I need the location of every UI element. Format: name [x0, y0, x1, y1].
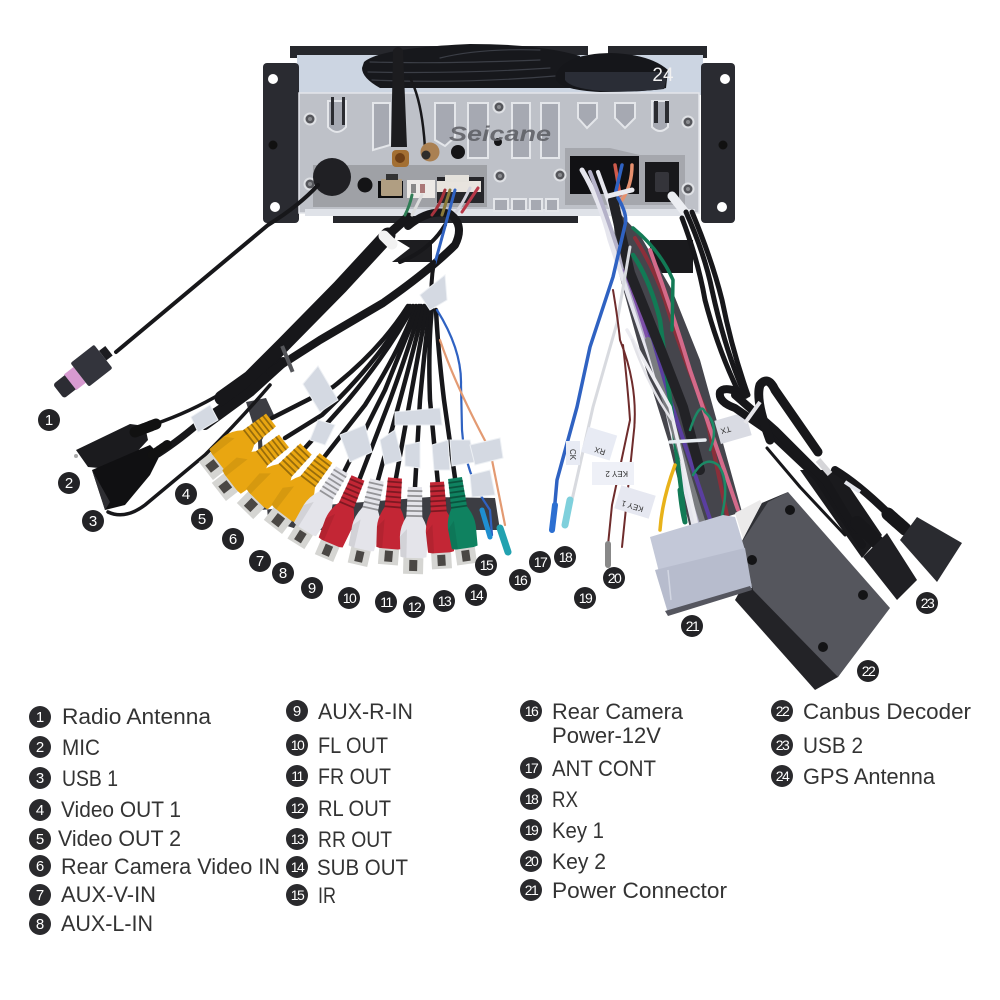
white plug 2: [344, 477, 391, 568]
antenna stub: [391, 47, 407, 147]
cable tie: [745, 402, 760, 423]
cable: strand 2: [692, 212, 748, 395]
cable: bundle to socket: [388, 217, 408, 235]
green plug: [441, 476, 481, 566]
wire: blue: [553, 198, 626, 525]
cable tie upper: [608, 190, 632, 196]
wire: RX white: [572, 247, 630, 500]
callout 1: 1: [45, 412, 53, 429]
item 19: [520, 818, 604, 843]
bundled black sleeve: [613, 200, 700, 470]
white plug 1: [284, 463, 354, 551]
white sleeve: [845, 482, 860, 492]
item 4: Video OUT 1: [61, 797, 181, 822]
top edge shade: [740, 492, 788, 545]
callout 5: 5: [198, 511, 206, 528]
item 13: RR OUT: [318, 827, 392, 852]
connector: USB 1 plug: [92, 444, 168, 510]
red plug 1: [311, 473, 371, 564]
cable: main coil: [720, 389, 862, 545]
cable: radio antenna: [116, 185, 318, 352]
callout 21: 21: [686, 618, 700, 634]
callout 18: 18: [559, 549, 573, 565]
item 9: AUX-R-IN: [318, 699, 413, 724]
RCA plugs: [196, 407, 481, 574]
white plug 3: [399, 487, 429, 574]
dark bracket behind RCA plugs: [246, 398, 500, 530]
item 15: 15: [291, 887, 305, 903]
item 14: 14: [291, 859, 305, 875]
cable: MIC: [155, 393, 222, 424]
cable: red 3: [429, 308, 438, 484]
item 14: SUB OUT: [317, 855, 408, 880]
callout 11: [375, 591, 397, 613]
yellow wire: [660, 465, 675, 530]
callout 13: 13: [438, 593, 452, 609]
GPS antenna puck: [556, 53, 668, 92]
item 17: ANT CONT: [552, 756, 656, 781]
callout 5: [191, 508, 213, 530]
item 20: [520, 849, 606, 874]
item 24: GPS Antenna: [803, 764, 936, 789]
silver port: [378, 174, 403, 198]
callout 7: [249, 550, 271, 572]
teal sleeve tip: [500, 528, 508, 552]
white ribbon connector large: [437, 175, 484, 203]
item 11: 11: [291, 768, 304, 784]
callout 4: [175, 483, 197, 505]
callout 21: [681, 615, 703, 637]
wire fan from power socket: [582, 165, 738, 530]
item 18: [520, 787, 578, 812]
item 3: 3: [36, 770, 44, 787]
callout 13: [433, 590, 455, 612]
item 7: 7: [36, 887, 44, 904]
callout 3: 3: [89, 513, 97, 530]
label: RX: RX: [593, 445, 607, 457]
cable: trunk: [431, 262, 434, 305]
bottom lip: [305, 209, 695, 216]
item 23: USB 2: [803, 733, 863, 758]
panel holes: [358, 138, 502, 192]
item 5: 5: [36, 831, 44, 848]
GPS callout number 24: 24: [652, 65, 674, 86]
blue sleeve 17: [552, 505, 555, 530]
item 7: AUX-V-IN: [61, 882, 156, 907]
white ferrule on plug cable: [672, 196, 688, 216]
cable: strand 1: [686, 212, 745, 395]
callout 19: 19: [579, 590, 593, 606]
yellow plugs: [196, 407, 339, 537]
antenna lead: [410, 78, 425, 148]
grommet: [313, 158, 351, 196]
cable: red 2: [396, 306, 427, 478]
item 11: FR OUT: [318, 764, 391, 789]
item 21: 21: [525, 882, 539, 898]
legend column 1: [29, 704, 280, 936]
callout 9: [301, 577, 323, 599]
item 12: RL OUT: [318, 796, 391, 821]
label: KEY 1: [614, 485, 656, 519]
label: KEY 1: KEY 1: [620, 498, 645, 514]
wire: blue IR: [437, 310, 492, 535]
item 24: 24: [776, 768, 790, 784]
cable: thick bundle: [222, 235, 388, 398]
callout 10: 10: [343, 590, 357, 606]
item 6: Rear Camera Video IN: [61, 854, 280, 879]
pin row: [665, 586, 752, 616]
callout 10: [338, 587, 360, 609]
callout 8: [272, 562, 294, 584]
label: ANT CONT: CK: [568, 449, 577, 461]
callout 12: [403, 596, 425, 618]
USB 2 plug a: [863, 533, 917, 600]
USB 2 plug b: [900, 517, 962, 582]
item 15: IR: [318, 883, 336, 908]
ribbon plug: [735, 500, 768, 545]
top dark strips: [290, 46, 707, 223]
cable: green: [436, 310, 455, 478]
connector: MIC plug: [74, 424, 156, 470]
item 21: Power Connector: [552, 878, 727, 903]
callout 16: 16: [514, 572, 528, 588]
item 9: 9: [293, 703, 301, 720]
item 15: [286, 883, 336, 908]
item 13: [286, 827, 392, 852]
item 23: 23: [776, 737, 790, 753]
item 19: 19: [525, 822, 539, 838]
upper silver cover: [297, 55, 703, 95]
punched slots: [328, 101, 668, 211]
blue sleeve tip: [482, 510, 490, 537]
callout 6: [222, 528, 244, 550]
callout 20: 20: [608, 570, 622, 586]
item 1: 1: [36, 709, 44, 726]
callout 14: [465, 584, 487, 606]
callout 17: 17: [534, 554, 548, 570]
item 10: [286, 733, 388, 758]
screws: [747, 505, 868, 652]
label: ANT CONT: [566, 441, 580, 465]
white wire labels left: [191, 275, 503, 497]
silver clip: [818, 460, 830, 474]
canbus decoder box: [735, 492, 890, 690]
callout 19: [574, 587, 596, 609]
cable: thin strand: [767, 448, 845, 535]
cable: second coil: [735, 395, 855, 530]
callout 17: [529, 551, 551, 573]
callout 11: 11: [380, 594, 393, 610]
loom coloured wires: [405, 188, 478, 263]
white wire over sleeve: [627, 330, 698, 530]
right mounting bracket: [701, 63, 735, 223]
main metal plate: [299, 93, 699, 213]
callout 12: 12: [408, 599, 422, 615]
cable tie on wires: [670, 440, 705, 442]
GPS right plug socket: [645, 162, 679, 202]
power socket black: [570, 156, 639, 194]
cable: yellow 3: [305, 306, 413, 448]
callout 20: [603, 567, 625, 589]
item 23: [771, 733, 863, 758]
wire: Key 2 brown: [608, 345, 630, 545]
cable: yellow 4: [325, 306, 416, 456]
cable ties: [280, 345, 294, 373]
callout 14: 14: [470, 587, 484, 603]
label: TX: [714, 412, 752, 444]
item 12: [286, 796, 391, 821]
lower connector recess: [313, 165, 487, 207]
wire: white to right: [632, 340, 672, 420]
right bracket piece: [650, 240, 693, 273]
callout 4: 4: [182, 486, 190, 503]
callout 15: 15: [480, 557, 494, 573]
cable: red 1: [360, 306, 421, 478]
cable: white 1: [344, 306, 419, 472]
USB neck a: [857, 523, 877, 542]
item 18: 18: [525, 791, 539, 807]
head unit rear panel: [263, 44, 735, 223]
callout 2: 2: [65, 475, 73, 492]
item 20: 20: [525, 853, 539, 869]
side face: [735, 582, 850, 690]
item 22: 22: [776, 703, 790, 719]
cable: right loop: [759, 381, 818, 452]
dense wire underlay: [612, 205, 742, 528]
item 3: [29, 766, 118, 791]
numbered callouts on photo: [38, 409, 938, 682]
item 22: Canbus Decoder: [803, 699, 971, 724]
item 8: 8: [36, 916, 44, 933]
bracket behind left loop: [392, 240, 432, 262]
item 2: 2: [36, 739, 44, 756]
item 8: AUX-L-IN: [61, 911, 153, 936]
item 10: FL OUT: [318, 733, 388, 758]
callout 7: 7: [256, 553, 264, 570]
gold antenna connectors: [392, 142, 440, 167]
wire labels right: [566, 412, 752, 519]
right black USB cables: [672, 196, 962, 600]
top face: [740, 492, 890, 677]
item 10: 10: [291, 737, 305, 753]
callout 6: 6: [229, 531, 237, 548]
wire: orange: [440, 340, 505, 525]
cable: yellow 2: [285, 306, 410, 438]
cable: USB return loop: [108, 385, 270, 515]
label: RX: [581, 427, 617, 461]
item 11: [286, 764, 391, 789]
cable: yellow 1: [272, 306, 408, 418]
item 5: Video OUT 2: [58, 826, 181, 851]
callout 22: 22: [862, 663, 876, 679]
Seicane watermark: Seicane: [449, 123, 551, 146]
callout 23: 23: [921, 595, 935, 611]
callout 1: [38, 409, 60, 431]
item 6: 6: [36, 858, 44, 875]
cable: inner loop: [400, 225, 445, 262]
callout 16: [509, 569, 531, 591]
callout 22: [857, 660, 879, 682]
cable: to plug b: [835, 470, 895, 520]
item 18: RX: [552, 787, 578, 812]
red plug 3: [423, 481, 456, 570]
green wire: [680, 490, 685, 522]
label: KEY 2: KEY 2: [605, 469, 628, 478]
item 4: 4: [36, 802, 44, 819]
cable: thick lower tail: [205, 362, 283, 425]
teal sleeve 18: [565, 500, 570, 525]
white ribbon connector small: [407, 180, 435, 198]
lower housing: [655, 548, 752, 613]
label: TX: TX: [719, 424, 732, 436]
USB neck b: [888, 514, 905, 529]
item 13: 13: [291, 831, 305, 847]
screws: [304, 100, 694, 196]
legend column 2: [286, 699, 413, 908]
sleeve key 2: [605, 544, 611, 565]
item 16: Rear Camera: [552, 699, 684, 724]
cable: white 2: [378, 306, 424, 480]
item 20: Key 2: [552, 849, 606, 874]
legend column 4: [771, 699, 971, 789]
label: KEY 2: [592, 462, 634, 485]
edge highlight: [668, 570, 671, 600]
cable: white 3: [415, 306, 430, 487]
callout 15: [475, 554, 497, 576]
item 1: Radio Antenna: [62, 704, 212, 729]
power connector: [650, 515, 752, 616]
wire: Key 1 brown: [613, 290, 635, 547]
item 3: USB 1: [62, 766, 118, 791]
callout 8: 8: [279, 565, 287, 582]
coiled GPS cable: [362, 44, 580, 88]
item 16: [520, 699, 684, 748]
callout 2: [58, 472, 80, 494]
callout 3: [82, 510, 104, 532]
callout 9: 9: [308, 580, 316, 597]
right connector recess: [565, 148, 685, 205]
right wiring loom: [552, 165, 742, 565]
cable: lower loop: [270, 212, 459, 372]
item 16: 16: [525, 703, 539, 719]
connector: radio antenna: [49, 340, 119, 403]
green looped wire: [690, 409, 725, 515]
red plug 2: [374, 477, 409, 566]
item 2: MIC: [62, 735, 100, 760]
upper housing: [650, 515, 745, 576]
item 16: Power-12V: [552, 723, 661, 748]
callout 23: [916, 592, 938, 614]
cable: USB 1: [158, 395, 240, 454]
white tape on bundle: [384, 236, 392, 244]
item 2: [29, 735, 100, 760]
callout 18: [554, 546, 576, 568]
item 19: Key 1: [552, 818, 604, 843]
left wiring loom: [108, 188, 508, 552]
item 17: 17: [525, 760, 539, 776]
dense cable mass: [800, 470, 882, 558]
left mounting bracket: [263, 63, 299, 223]
item 12: 12: [291, 800, 305, 816]
legend column 3: [520, 699, 727, 903]
cable: strand 3: [682, 218, 740, 395]
